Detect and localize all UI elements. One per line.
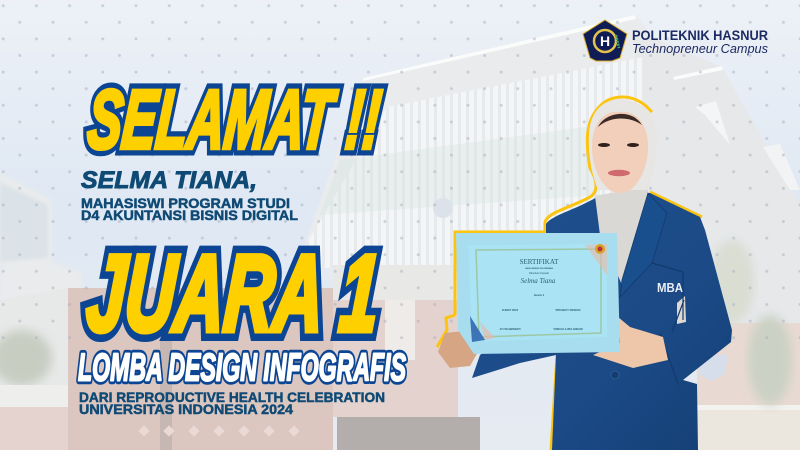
hair (598, 114, 642, 127)
sleeve and pocket seams (652, 263, 684, 384)
mouth (608, 170, 630, 176)
logo: Politeknik Hasnur emblem (583, 20, 627, 61)
logo text: POLITEKNIK HASNUR (632, 28, 768, 43)
certificate text: PROJECT DESIGN (556, 308, 580, 312)
blazer (472, 193, 732, 450)
background photo: campus building: HASNUR (390, 270, 443, 282)
certificate text: SERTIFIKAT (520, 258, 559, 266)
certificate text: AYU RAHMAWATI (500, 328, 521, 331)
heading: SELAMAT: SELAMAT !! (84, 73, 385, 166)
yellow cutout outline (437, 97, 702, 450)
certificate text: VRISCILLA WULANDARI (553, 328, 583, 331)
heading: JUARA 1 (83, 233, 383, 353)
lapel (620, 193, 667, 297)
event details: UNIVERSITAS INDONESIA 2024 (79, 401, 293, 417)
MBA pocket logo: MBA (657, 280, 684, 295)
person: student in blue blazer (437, 97, 732, 450)
certificate text: Selma Tiana (521, 277, 556, 285)
study program: MAHASISWI PROGRAM STUDI (81, 195, 290, 211)
winner name: SELMA TIANA, (81, 167, 257, 194)
logo text: Technopreneur Campus (632, 41, 768, 56)
study program: D4 AKUNTANSI BISNIS DIGITAL (81, 207, 298, 223)
right hand (593, 317, 668, 368)
logo text (632, 28, 768, 56)
certificate in frame (456, 233, 620, 354)
certificate text (500, 258, 583, 331)
eyes (598, 143, 639, 147)
heading: JUARA 1: JUARA 1 (83, 233, 383, 353)
certificate text: Diberikan Kepada (529, 272, 550, 275)
heading: SELAMAT: SELAMAT !! (84, 73, 385, 166)
certificate text: JUMAT 2024 (502, 308, 519, 312)
subheading: competition name: LOMBA DESIGN INFOGRAFIS (78, 346, 406, 390)
jacket button (611, 371, 619, 379)
certificate text: HASIL BIDANG PELOMBAAN (525, 267, 553, 270)
subheading: competition name (78, 346, 406, 390)
study program (81, 195, 298, 223)
certificate text: Juara 1 (534, 293, 545, 297)
heading: SELAMAT (84, 73, 385, 166)
face (592, 112, 648, 193)
logo: Politeknik Hasnur emblem: H (600, 33, 610, 49)
heading: JUARA 1: JUARA 1 (83, 233, 383, 353)
inner shirt (595, 186, 648, 285)
hijab (589, 99, 657, 190)
event details: DARI REPRODUCTIVE HEALTH CELEBRATION (79, 389, 385, 405)
event details (79, 389, 385, 417)
gap between arm and body (677, 296, 686, 324)
left hand (438, 330, 478, 368)
subheading: competition name: LOMBA DESIGN INFOGRAFIS (78, 346, 406, 390)
